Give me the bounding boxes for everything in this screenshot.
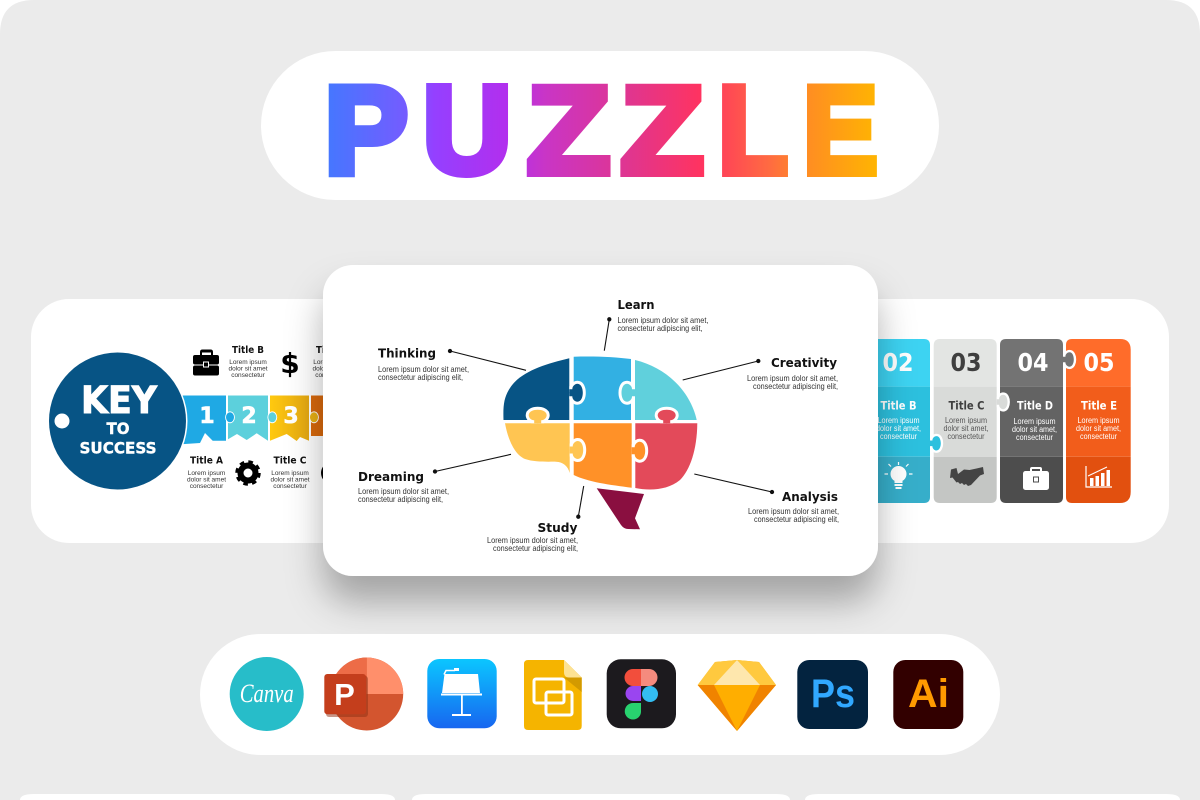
label: study: Study: [538, 520, 578, 535]
icon: keynote: [427, 659, 497, 728]
text: title c: Title C: [274, 456, 306, 466]
column 03: dolor sit amet,: [944, 424, 988, 433]
icon: chart: [1086, 466, 1112, 487]
column 03: Lorem ipsum: [945, 416, 987, 425]
column 03: consectetur: [948, 432, 985, 441]
icon: dollar: $: [280, 347, 300, 380]
icon: partial circle: [321, 462, 343, 484]
label: dreaming: consectetur adipiscing elit,: [358, 494, 443, 504]
step banners: 3: [283, 404, 299, 429]
step banners: [170, 396, 340, 445]
icon: powerpoint: [324, 658, 403, 730]
icon: illustrator: [893, 660, 963, 729]
column 02: dolor sit amet,: [876, 424, 921, 433]
label: creativity: Lorem ipsum dolor sit amet,: [747, 373, 838, 383]
label: dreaming: [358, 469, 449, 504]
piece: dark blue: [503, 358, 569, 420]
icon: sketch: [698, 660, 776, 731]
column 03: [934, 339, 997, 503]
icon: canva: [230, 657, 304, 731]
label: study: [487, 520, 578, 553]
title: Z: [621, 62, 704, 200]
label: creativity: [747, 355, 838, 391]
column 05: consectetur: [1080, 432, 1117, 441]
icon: figma: [607, 659, 676, 728]
title: Z: [527, 62, 610, 200]
label: analysis: Lorem ipsum dolor sit amet,: [748, 506, 839, 516]
panel: app icons: [200, 634, 1000, 755]
title: E: [803, 62, 878, 200]
label: thinking: Lorem ipsum dolor sit amet,: [378, 364, 469, 374]
column 05: 05: [1084, 348, 1114, 377]
label: thinking: [378, 346, 469, 382]
title: [324, 62, 878, 200]
label: learn: Learn: [618, 297, 654, 312]
column 04: Title D: [1017, 398, 1053, 412]
text: title c: [270, 456, 310, 490]
knob: orange into red: [632, 442, 645, 460]
text: title a: dolor sit amet: [187, 476, 226, 484]
panel: numbered columns: [760, 299, 1169, 543]
icon: google slides: [524, 660, 582, 730]
text: title b: consectetur: [231, 372, 266, 379]
piece: red: [635, 423, 697, 489]
column 03: 03: [950, 348, 982, 377]
key tag: SUCCESS: [80, 438, 156, 458]
icon: handshake: [950, 467, 984, 486]
column 02: Lorem ipsum: [878, 416, 920, 425]
label: study: consectetur adipiscing elit,: [493, 543, 578, 553]
column 04: consectetur: [1016, 433, 1053, 442]
text: title d: [312, 345, 352, 379]
label: analysis: Analysis: [782, 489, 838, 504]
step banners: 2: [241, 404, 257, 429]
icon: photoshop: [797, 660, 868, 729]
label: learn: Lorem ipsum dolor sit amet,: [618, 315, 708, 325]
key tag: TO: [106, 419, 130, 438]
column 03: Title C: [948, 398, 984, 412]
bottom cards: [20, 794, 1180, 800]
label: analysis: consectetur adipiscing elit,: [754, 514, 839, 524]
icon: bulb: [884, 462, 912, 489]
text: title b: [228, 345, 268, 379]
puzzle connectors: [930, 352, 1074, 450]
column 02: Title B: [880, 398, 916, 412]
panel: key to success: [31, 299, 451, 543]
leader lines: [433, 318, 774, 518]
piece: blue: [574, 356, 631, 420]
column 05: dolor sit amet,: [1076, 424, 1121, 433]
knob: dark blue into blue: [569, 384, 583, 402]
piece: yellow: [505, 423, 570, 473]
icon: gear: [237, 462, 259, 484]
column 02: [830, 339, 930, 503]
text: title a: Title A: [190, 456, 223, 466]
label: study: Lorem ipsum dolor sit amet,: [487, 535, 578, 545]
icon: powerpoint: P: [334, 677, 355, 712]
key tag: [48, 351, 188, 491]
icon: photoshop: Ps: [811, 672, 855, 716]
text: title a: consectetur: [190, 483, 224, 490]
knob: red into teal: [658, 410, 676, 423]
label: dreaming: Dreaming: [358, 469, 424, 484]
label: creativity: Creativity: [771, 355, 837, 370]
column 05: Lorem ipsum: [1078, 416, 1120, 425]
icon: illustrator: Ai: [908, 672, 949, 716]
icon: canva: Canva: [240, 679, 294, 708]
label: analysis: [748, 489, 839, 524]
title: U: [423, 62, 512, 200]
column 04: 04: [1018, 348, 1048, 377]
label: learn: consectetur adipiscing elit,: [618, 323, 702, 333]
icon: briefcase white: [1023, 467, 1049, 490]
text: title d: dolor sit amet: [312, 366, 352, 372]
column 02: consectetur: [880, 432, 917, 441]
column 04: dolor sit amet,: [1012, 425, 1057, 434]
title: P: [324, 62, 408, 200]
column 05: Title E: [1081, 398, 1117, 412]
text: title d: consectetur: [315, 372, 350, 379]
panel: brain card: [323, 265, 878, 576]
text: title d: Lorem ipsum: [313, 359, 351, 366]
label: learn: [618, 297, 708, 333]
text: title a: [187, 456, 226, 490]
piece: orange: [574, 423, 632, 488]
text: title b: Lorem ipsum: [229, 359, 267, 366]
piece: stem: [597, 488, 644, 529]
text: title c: consectetur: [273, 483, 308, 490]
label: dreaming: Lorem ipsum dolor sit amet,: [358, 486, 449, 496]
text: title b: Title B: [232, 345, 264, 356]
text: title b: dolor sit amet: [228, 366, 268, 372]
column 02: 02: [882, 348, 914, 377]
text: title c: Lorem ipsum: [271, 470, 309, 477]
text: title c: dolor sit amet: [270, 476, 310, 484]
step banners: 1: [199, 404, 215, 429]
label: creativity: consectetur adipiscing elit,: [753, 381, 838, 391]
title: L: [718, 62, 788, 200]
key tag: KEY: [81, 379, 158, 422]
knob: yellow into orange: [570, 441, 583, 459]
knob: yellow into dark blue: [529, 410, 547, 423]
title pill: [261, 51, 939, 200]
text: title d: Title D: [316, 345, 348, 356]
column 04: [1000, 339, 1063, 503]
column 04: Lorem ipsum: [1014, 417, 1056, 426]
label: thinking: consectetur adipiscing elit,: [378, 372, 463, 382]
brain puzzle: [503, 356, 697, 529]
text: title a: Lorem ipsum: [188, 470, 225, 477]
label: thinking: Thinking: [378, 346, 436, 360]
column 05: [1066, 339, 1131, 503]
piece: teal: [635, 360, 697, 420]
icon: briefcase: [193, 350, 219, 376]
knob: teal into blue: [622, 384, 635, 402]
